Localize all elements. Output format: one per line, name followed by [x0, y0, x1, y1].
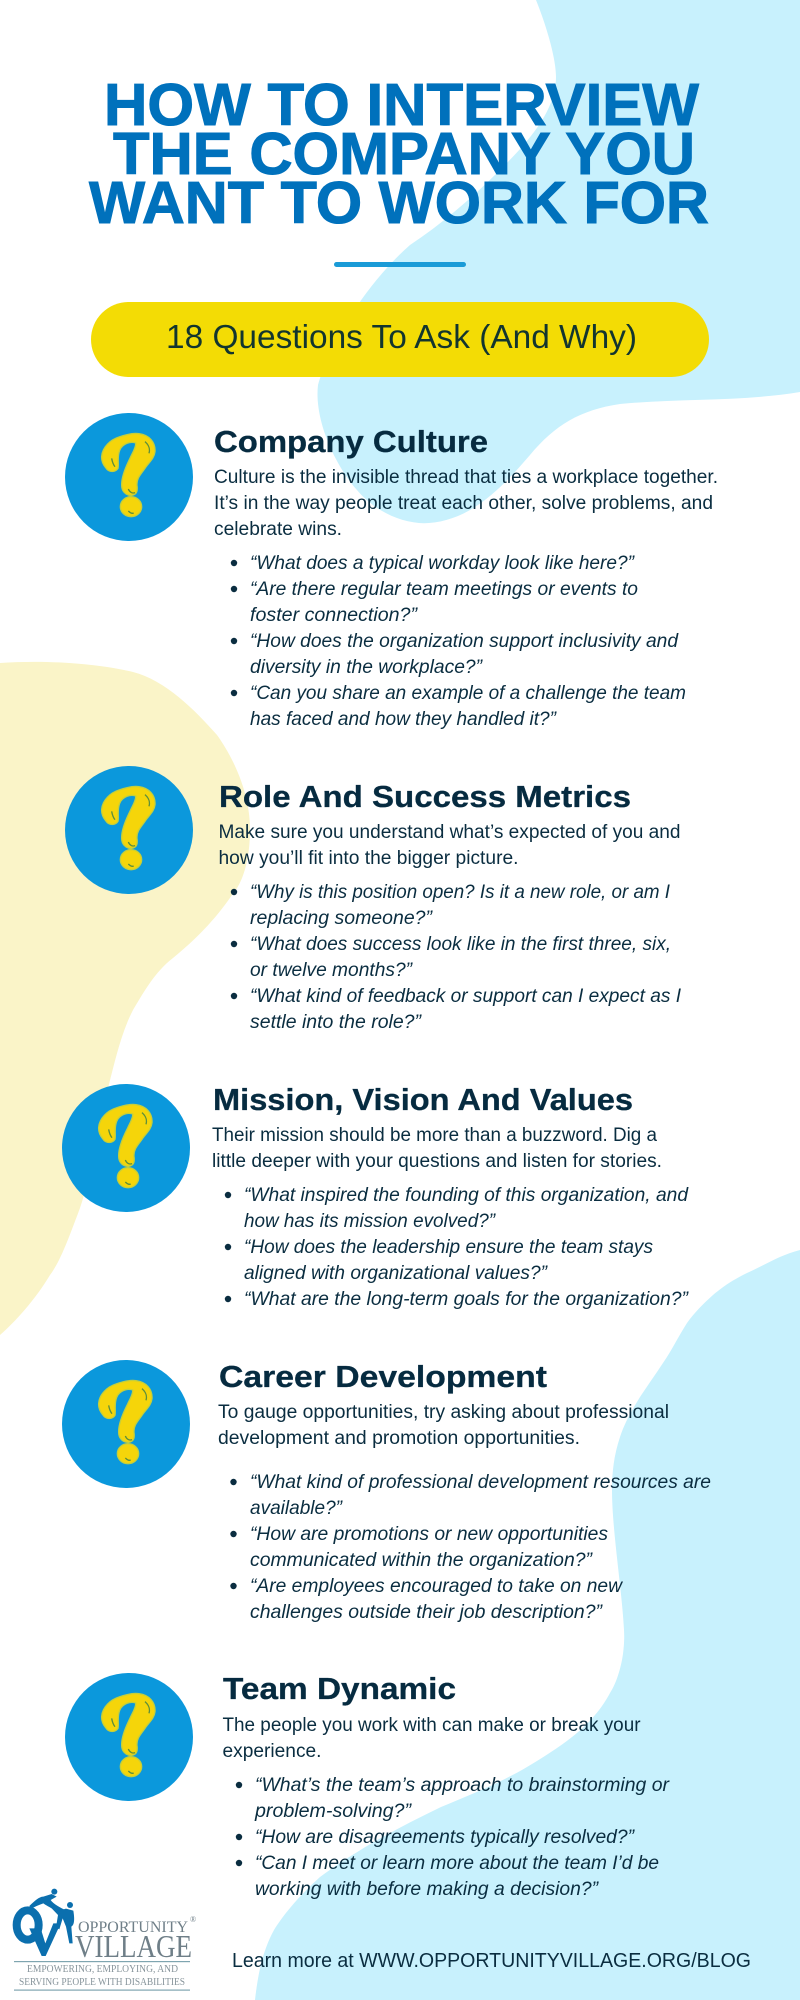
- intro text: experience.: [222, 1741, 322, 1762]
- icon: question mark 3: [62, 1084, 190, 1212]
- background blob: bottom right light blue: [255, 1250, 800, 2000]
- question list: “What’s the team’s approach to brainstorming or: [255, 1775, 670, 1796]
- question list: [230, 1472, 711, 1623]
- question list: “What kind of professional development resources are: [250, 1472, 711, 1493]
- question list: “What kind of feedback or support can I expect as I: [250, 986, 682, 1007]
- subtitle pill: 18 Questions To Ask (And Why): [166, 318, 637, 355]
- question list: “What does success look like in the first three, six,: [250, 934, 671, 955]
- intro text: celebrate wins.: [214, 519, 342, 540]
- title: HOW TO INTERVIEW: [104, 72, 699, 138]
- subtitle pill: [91, 302, 709, 377]
- question list: diversity in the workplace?”: [250, 657, 484, 678]
- icon: question mark 5: [65, 1673, 193, 1801]
- title: [89, 72, 709, 236]
- background blob: left pale yellow: [0, 662, 250, 1335]
- question list: working with before making a decision?”: [255, 1879, 600, 1900]
- heading: Team Dynamic: [223, 1671, 456, 1706]
- logo wordmark: OPPORTUNITY: [78, 1919, 188, 1936]
- question list: available?”: [250, 1498, 344, 1519]
- intro text: It’s in the way people treat each other, solve problems, and: [214, 493, 713, 514]
- logo tagline: EMPOWERING, EMPLOYING, AND: [27, 1964, 178, 1975]
- question list: has faced and how they handled it?”: [250, 709, 558, 730]
- question list: communicated within the organization?”: [250, 1550, 594, 1571]
- intro text: how you’ll fit into the bigger picture.: [218, 848, 518, 869]
- section: role and success metrics: [65, 766, 682, 1033]
- section: team dynamic: [65, 1671, 670, 1900]
- intro text: Culture is the invisible thread that ties a workplace together.: [214, 467, 718, 488]
- section: mission, vision and values: [62, 1082, 690, 1310]
- question list: or twelve months?”: [250, 960, 414, 981]
- question list: foster connection?”: [250, 605, 419, 626]
- icon: question mark 4: [62, 1360, 190, 1488]
- intro text: little deeper with your questions and listen for stories.: [212, 1151, 662, 1172]
- logo: Opportunity Village: [14, 1889, 196, 1991]
- heading: Career Development: [219, 1359, 547, 1394]
- question list: “How does the organization support inclusivity and: [250, 631, 679, 652]
- question list: “What inspired the founding of this organization, and: [244, 1185, 689, 1206]
- footer link: Learn more at WWW.OPPORTUNITYVILLAGE.ORG/BLOG: [232, 1950, 751, 1972]
- logo: Opportunity Village: VILLAGE: [75, 1928, 192, 1964]
- background blob: top right light blue: [318, 0, 800, 523]
- icon: question mark 2: [65, 766, 193, 894]
- question list: problem-solving?”: [254, 1801, 413, 1822]
- intro text: [218, 822, 680, 869]
- question list: aligned with organizational values?”: [244, 1263, 549, 1284]
- question list: “What does a typical workday look like here?”: [250, 553, 636, 574]
- title: THE COMPANY YOU: [113, 121, 695, 187]
- question list: how has its mission evolved?”: [244, 1211, 497, 1232]
- title underline: [334, 262, 466, 267]
- section: company culture: [65, 413, 718, 730]
- intro text: [218, 1402, 669, 1449]
- icon: question mark 1: [65, 413, 193, 541]
- question list: “Can you share an example of a challenge the team: [250, 683, 686, 704]
- question list: [231, 553, 686, 730]
- intro text: The people you work with can make or break your: [222, 1715, 641, 1736]
- question list: “Are there regular team meetings or events to: [250, 579, 638, 600]
- question list: “What are the long-term goals for the organization?”: [244, 1289, 690, 1310]
- title: WANT TO WORK FOR: [89, 170, 709, 236]
- question list: [236, 1775, 670, 1900]
- question list: “Why is this position open? Is it a new role, or am I: [250, 882, 671, 903]
- question list: “How does the leadership ensure the team stays: [244, 1237, 653, 1258]
- question list: “How are promotions or new opportunities: [250, 1524, 608, 1545]
- question list: “Are employees encouraged to take on new: [250, 1576, 623, 1597]
- logo: Opportunity Village: ®: [190, 1915, 196, 1924]
- section: career development: [62, 1359, 711, 1623]
- logo mark: QV with climbing figures: [17, 1889, 74, 1956]
- question list: [225, 1185, 690, 1310]
- question list: settle into the role?”: [250, 1012, 423, 1033]
- heading: Mission, Vision And Values: [213, 1082, 633, 1117]
- intro text: [214, 467, 718, 540]
- logo: Opportunity Village: SERVING PEOPLE WITH DISABILITIES: [19, 1977, 185, 1988]
- question list: challenges outside their job description?”: [250, 1602, 604, 1623]
- intro text: Make sure you understand what’s expected of you and: [218, 822, 680, 843]
- question list: “How are disagreements typically resolved?”: [255, 1827, 636, 1848]
- heading: Company Culture: [214, 424, 488, 459]
- question list: “Can I meet or learn more about the team I’d be: [255, 1853, 659, 1874]
- intro text: Their mission should be more than a buzzword. Dig a: [212, 1125, 657, 1146]
- question list: replacing someone?”: [250, 908, 434, 929]
- question list: [231, 882, 682, 1033]
- intro text: [212, 1125, 662, 1172]
- intro text: [222, 1715, 641, 1762]
- intro text: development and promotion opportunities.: [218, 1428, 580, 1449]
- intro text: To gauge opportunities, try asking about professional: [218, 1402, 669, 1423]
- heading: Role And Success Metrics: [219, 779, 631, 814]
